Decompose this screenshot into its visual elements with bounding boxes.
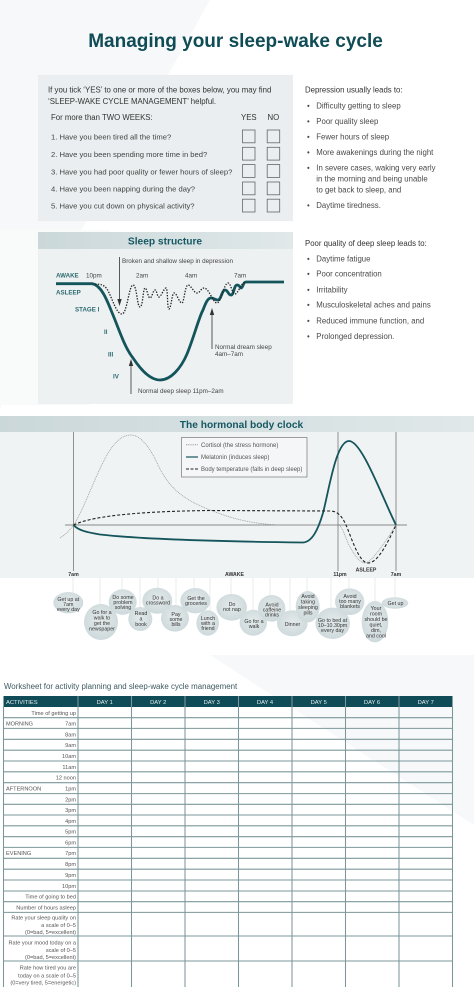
bubble: pay some bills	[161, 605, 189, 632]
text block: depression effects: •	[307, 148, 310, 157]
row labels: Number of hours asleep	[16, 906, 76, 912]
text block: deep sleep effects	[305, 239, 431, 341]
time labels: 7am	[234, 272, 246, 280]
time axis labels	[68, 568, 402, 578]
bubble: go to bed: every day	[321, 628, 344, 634]
line: melatonin	[74, 441, 396, 542]
text block: deep sleep effects: Poor quality of deep sleep leads to:	[305, 239, 427, 248]
bubble: your room: quiet,	[370, 622, 382, 628]
time labels	[86, 272, 246, 280]
bubble: pay some bills: some	[170, 617, 183, 623]
activity bubbles	[53, 578, 408, 642]
text block: deep sleep effects: •	[307, 332, 310, 341]
text block: depression effects: to get back to sleep, and	[316, 186, 401, 195]
bubble: lunch with a friend: Lunch	[201, 616, 215, 622]
bubble: crossword: Do a	[152, 596, 164, 602]
text block: deep sleep effects: •	[307, 254, 310, 263]
bubble: read a book: Read	[135, 611, 147, 617]
row labels: Rate your mood today on a	[9, 940, 77, 946]
bubble: go for a walk	[240, 610, 267, 636]
row labels: 9am	[65, 743, 76, 749]
bubble: your room	[362, 601, 388, 642]
time axis labels: 7am	[68, 572, 79, 578]
axis labels	[56, 272, 120, 380]
bubble: avoid caffeine: caffeine	[263, 608, 281, 614]
bubble: avoid sleeping pills	[296, 591, 320, 622]
table header: DAY 1	[97, 700, 113, 706]
bubble: avoid sleeping pills: pills	[303, 610, 313, 616]
row labels: 2pm	[65, 797, 76, 803]
legend: Melatonin (induces sleep)	[201, 455, 269, 461]
row labels: 4pm	[65, 819, 76, 825]
text block: deep sleep effects: •	[307, 270, 310, 279]
panel: hormonal body clock	[0, 416, 474, 578]
chart axes	[65, 432, 407, 571]
bubble: avoid too many blankets	[335, 588, 364, 615]
bubble: your room: Your	[371, 606, 382, 612]
bubble: avoid caffeine	[258, 595, 285, 622]
bubble: go for a walk to get the newspaper: Go for a	[92, 610, 112, 616]
time axis labels: AWAKE	[225, 572, 245, 578]
label: dream sleep	[215, 344, 272, 358]
bubble: your room: dim,	[371, 628, 381, 634]
bubble: avoid sleeping pills: taking	[301, 600, 315, 606]
bubble: lunch with a friend: friend	[201, 626, 215, 632]
row labels: 8pm	[65, 862, 76, 868]
label: deep sleep: Normal deep sleep 11pm–2am	[138, 388, 224, 395]
text block: depression effects	[305, 86, 436, 210]
time axis labels: ASLEEP	[356, 568, 377, 574]
bubble: avoid too many blankets: too many	[339, 599, 361, 605]
row labels: 8am	[65, 732, 76, 738]
axis labels: II	[104, 329, 108, 336]
bubble: your room: should be	[365, 617, 388, 623]
text block: depression effects: •	[307, 132, 310, 141]
bubble: get up at 7am: 7am	[63, 602, 74, 608]
row labels: 9pm	[65, 873, 76, 879]
table header: DAY 2	[150, 700, 166, 706]
text block: deep sleep effects: Irritability	[316, 285, 348, 294]
bubble: avoid sleeping pills: sleeping	[298, 605, 318, 611]
label: dream sleep: Normal dream sleep	[215, 344, 272, 351]
text block: deep sleep effects: •	[307, 285, 310, 294]
row labels: a scale of 0–5	[41, 923, 76, 929]
table grid	[4, 696, 452, 987]
bubble: go to bed	[315, 608, 350, 639]
text block: depression effects: •	[307, 101, 310, 110]
row labels: Rate how tired you are	[20, 966, 76, 972]
bubble: groceries	[180, 588, 210, 613]
bubble: get up: Get up	[388, 601, 404, 607]
bubble: read a book	[128, 607, 152, 631]
question header	[51, 113, 279, 122]
bubble: do not nap: Do	[229, 602, 235, 608]
row labels	[6, 711, 77, 986]
table header	[4, 696, 452, 707]
row labels: (0=bad, 5=excellent)	[25, 930, 76, 936]
axis labels: ASLEEP	[56, 290, 81, 296]
row labels: EVENING	[6, 851, 31, 857]
bubble: go for a walk to get the newspaper: get the	[94, 621, 110, 627]
bubble: lunch with a friend: with a	[201, 621, 215, 627]
bubble: problem solving: Do some	[112, 595, 134, 601]
questions: 1. Have you been tired all the time?	[51, 133, 171, 142]
row labels: Rate your sleep quality on	[11, 915, 76, 921]
row labels: 3pm	[65, 808, 76, 814]
text block: depression effects: •	[307, 117, 310, 126]
row labels: (0=bad, 5=excellent)	[25, 955, 76, 961]
bubble: avoid too many blankets: blankets	[340, 604, 360, 610]
line: cortisol	[60, 435, 396, 563]
bubble: avoid sleeping pills: Avoid	[301, 594, 315, 600]
panel: sleep structure	[38, 232, 293, 404]
row labels: Time of going to bed	[25, 895, 76, 901]
legend: Cortisol (the stress hormone)	[201, 443, 278, 449]
bubble: pay some bills: bills	[171, 622, 181, 628]
text block: deep sleep effects: Reduced immune function, and	[316, 316, 424, 325]
arrow: dream sleep	[210, 308, 214, 349]
table header: DAY 6	[364, 700, 380, 706]
heading: sleep structure: Sleep structure	[128, 237, 202, 248]
bubble: problem solving: problem	[113, 600, 133, 606]
row labels: today on a scale of 0–5	[18, 973, 76, 979]
bubble: problem solving	[109, 589, 137, 615]
bubble: crossword: crossword	[146, 600, 170, 606]
intro text	[48, 86, 271, 106]
text block: depression effects: Fewer hours of sleep	[316, 132, 390, 141]
table header: DAY 5	[311, 700, 327, 706]
row labels: 7pm	[65, 851, 76, 857]
text block: depression effects: •	[307, 201, 310, 210]
row labels: 6pm	[65, 840, 76, 846]
text block: depression effects: Difficulty getting to sleep	[316, 101, 401, 110]
line: body temperature	[74, 510, 396, 563]
questions: 5. Have you cut down on physical activity?	[51, 202, 195, 211]
row labels: MORNING	[6, 722, 33, 728]
time labels: 2am	[136, 272, 148, 280]
bubble: go for a walk: Go for a	[244, 619, 264, 625]
heading: hormonal body clock: The hormonal body clock	[180, 420, 304, 431]
row labels: 10am	[62, 754, 76, 760]
text block: depression effects: in the morning and being unable	[316, 175, 428, 184]
questions	[51, 133, 232, 211]
bubble: read a book: a	[140, 616, 143, 622]
row labels: 10pm	[62, 884, 76, 890]
text block: deep sleep effects: Musculoskeletal aches and pains	[316, 301, 431, 310]
text block: depression effects: In severe cases, waking very early	[316, 163, 436, 172]
row labels: (0=very tired, 5=energetic)	[10, 980, 76, 986]
line: broken sleep	[95, 282, 245, 314]
text block: depression effects: Poor quality sleep	[316, 117, 379, 126]
intro text: ‘SLEEP-WAKE CYCLE MANAGEMENT’ helpful.	[48, 97, 216, 106]
questions: 2. Have you been spending more time in bed?	[51, 150, 207, 159]
arrow: broken sleep	[117, 257, 122, 306]
row labels: 1pm	[65, 786, 76, 792]
time axis labels: 7am	[391, 572, 402, 578]
question header: NO	[268, 113, 279, 122]
table header: DAY 3	[204, 700, 220, 706]
bubble: go to bed: Go to bed at	[318, 618, 348, 624]
bubble: do not nap	[216, 594, 247, 621]
row labels: 7am	[65, 722, 76, 728]
table header: DAY 7	[418, 700, 434, 706]
legend: Body temperature (falls in deep sleep)	[201, 467, 302, 473]
axis labels: AWAKE	[56, 272, 79, 280]
text block: deep sleep effects: Daytime fatigue	[316, 254, 370, 263]
worksheet table	[4, 696, 452, 987]
bubble: avoid too many blankets: Avoid	[343, 594, 357, 600]
questions: 4. Have you been napping during the day?	[51, 185, 195, 194]
bubble: do not nap: not nap	[223, 607, 241, 613]
bubble: dinner: Dinner	[285, 622, 301, 628]
text block: deep sleep effects: Poor concentration	[316, 270, 382, 279]
row labels: 12 noon	[56, 776, 76, 782]
row labels: 5pm	[65, 830, 76, 836]
bubble: get up at 7am	[53, 592, 83, 613]
bubble: go to bed: 10–10.30pm	[318, 623, 348, 629]
worksheet title: Worksheet for activity planning and sleep-wake cycle management	[4, 682, 238, 691]
bubble: your room: room	[370, 612, 383, 618]
bubble: crossword	[142, 588, 172, 614]
tick boxes	[242, 130, 280, 212]
time labels: 4am	[185, 272, 197, 280]
arrow: deep sleep	[129, 359, 133, 394]
text block: deep sleep effects: •	[307, 316, 310, 325]
table header: DAY 4	[257, 700, 274, 706]
bubble: avoid caffeine: Avoid	[265, 602, 279, 608]
intro text: If you tick ‘YES’ to one or more of the boxes below, you may find	[48, 86, 271, 95]
text block: deep sleep effects: Prolonged depression.	[316, 332, 394, 341]
bubble: your room: and cool	[366, 634, 386, 640]
time labels: 10pm	[86, 272, 102, 280]
bubble: groceries: Get the	[187, 596, 205, 602]
bubble: go for a walk to get the newspaper: newspaper	[89, 626, 115, 632]
legend	[182, 438, 307, 477]
row labels: Time of getting up	[31, 711, 76, 717]
question header: For more than TWO WEEKS:	[51, 113, 153, 122]
row labels: scale of 0–5	[46, 948, 76, 954]
questions: 3. Have you had poor quality or fewer hours of sleep?	[51, 167, 232, 176]
line: normal sleep	[56, 282, 284, 380]
text block: deep sleep effects: •	[307, 301, 310, 310]
label: broken sleep: Broken and shallow sleep in depression	[122, 258, 233, 265]
label: dream sleep: 4am–7am	[215, 351, 243, 358]
panel: questionnaire	[38, 75, 293, 221]
table header: ACTIVITIES	[6, 700, 38, 706]
bubble: avoid caffeine: drinks	[265, 612, 279, 618]
bubble: dinner	[277, 610, 308, 636]
bubble: go for a walk: walk	[249, 624, 260, 630]
axis labels: STAGE I	[75, 306, 100, 314]
bubble: get up at 7am: every day	[57, 607, 80, 613]
bubble: groceries: groceries	[185, 601, 207, 607]
text block: depression effects: •	[307, 163, 310, 172]
bubble: go for a walk to get the newspaper: walk to	[94, 616, 110, 622]
axis labels: III	[108, 352, 113, 358]
time axis labels: 11pm	[333, 572, 347, 578]
text block: depression effects: Daytime tiredness.	[316, 201, 381, 210]
bubble: get up	[382, 597, 408, 609]
bubble: read a book: book	[135, 622, 147, 628]
bubble: pay some bills: Pay	[171, 612, 181, 618]
text block: depression effects: Depression usually leads to:	[305, 86, 403, 95]
title: Managing your sleep-wake cycle	[88, 31, 383, 52]
bubble: problem solving: solving	[115, 605, 131, 611]
bubble: go for a walk to get the newspaper	[84, 604, 118, 640]
bubble: get up at 7am: Get up at	[57, 597, 80, 603]
question header: YES	[241, 113, 257, 122]
text block: depression effects: More awakenings during the night	[316, 148, 434, 157]
bubble: lunch with a friend	[196, 610, 219, 636]
row labels: 11am	[62, 765, 76, 771]
row labels: AFTERNOON	[6, 786, 41, 792]
axis labels: IV	[113, 374, 120, 380]
